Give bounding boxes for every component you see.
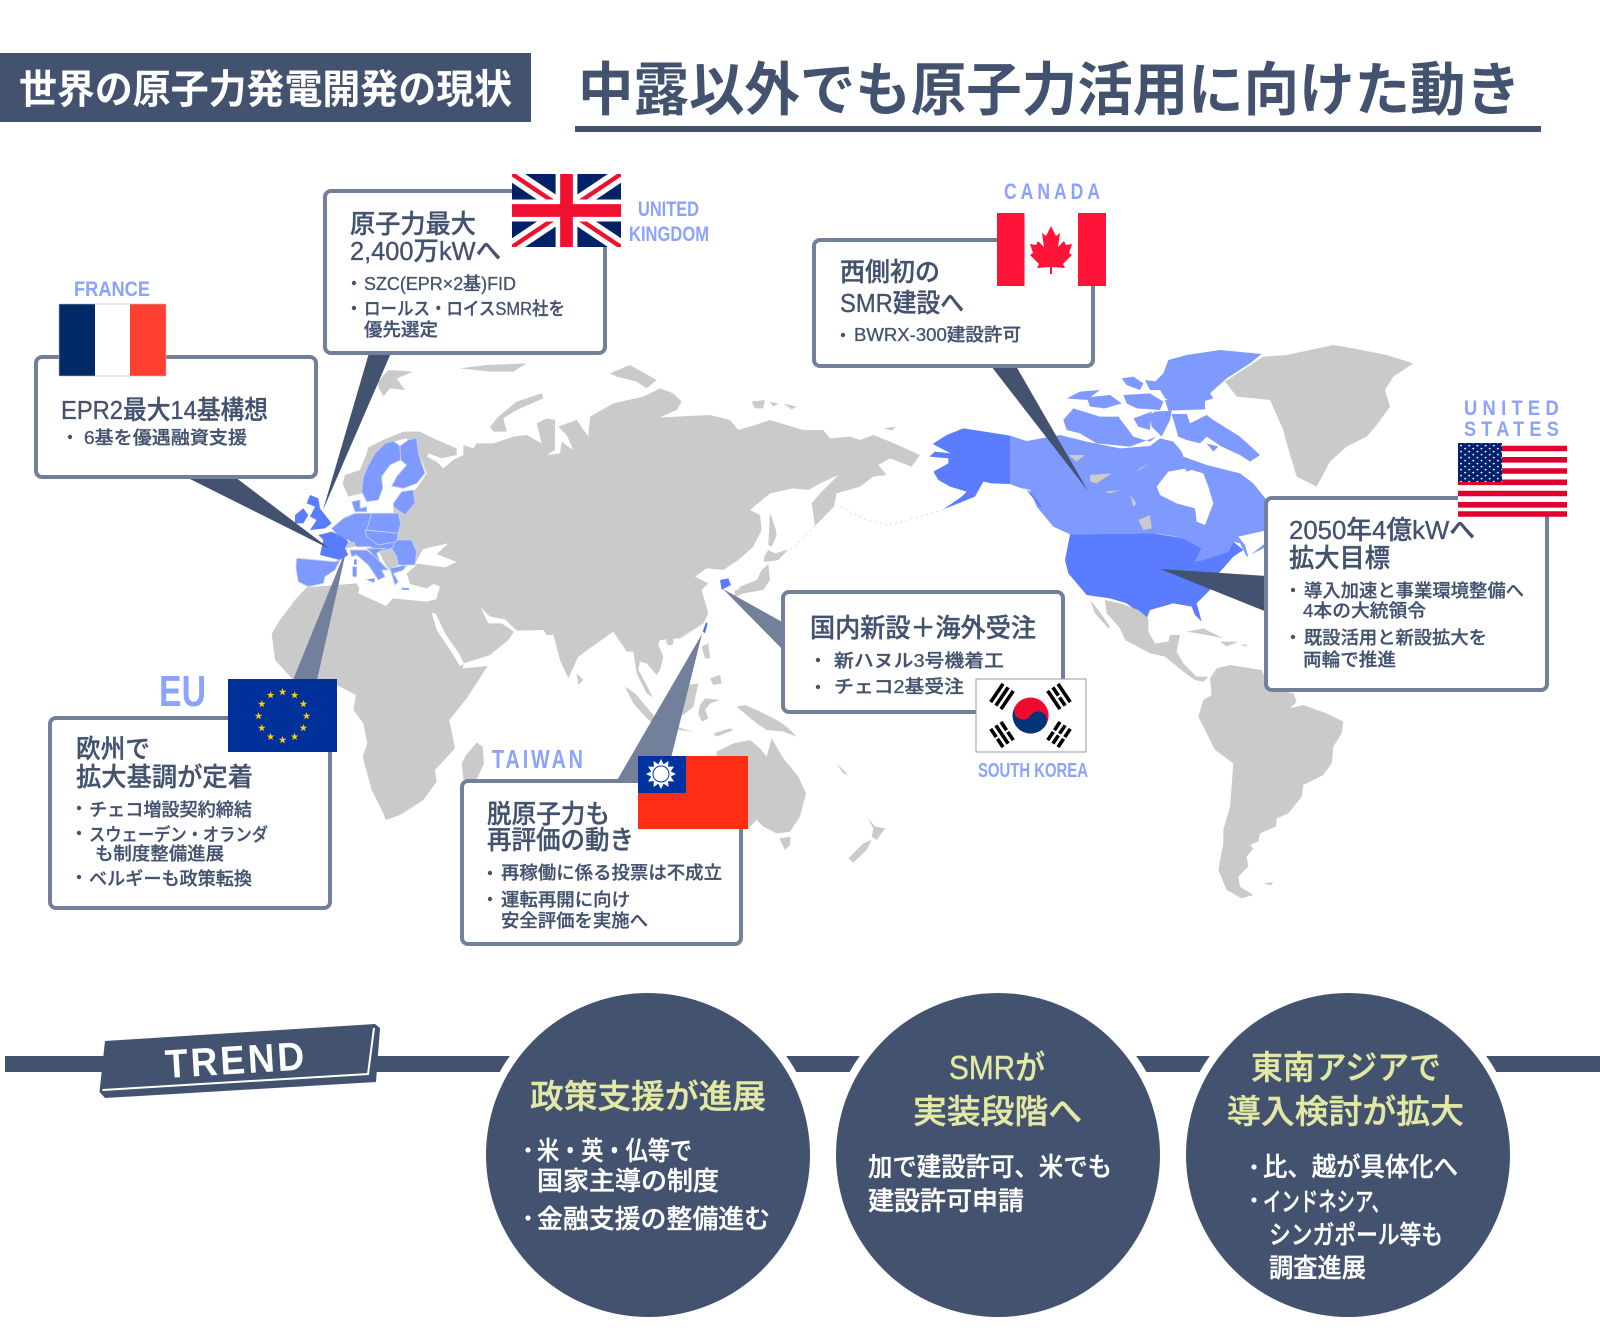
- flag: Taiwan: [638, 756, 748, 829]
- bullets: United States: [1291, 581, 1524, 670]
- bullets: South Korea: 新ハヌル3号機着工: [834, 651, 1004, 671]
- bullets: United Kingdom: SZC(EPR×2基)FID: [364, 274, 516, 294]
- heading: United States: 拡大目標: [1289, 543, 1390, 573]
- circle body: 比、越が具体化へ: [1263, 1152, 1458, 1182]
- panel: United States: [1266, 397, 1567, 690]
- France and United Kingdom highlights: [295, 495, 348, 560]
- Severnaya Zemlya: [610, 365, 657, 388]
- trend circle: Southeast Asia: [1178, 985, 1518, 1325]
- bullets: South Korea: [816, 651, 1004, 697]
- heading: United States: 2050年4億kWへ: [1289, 515, 1475, 545]
- circle body: 調査進展: [1269, 1253, 1366, 1283]
- label: United Kingdom: KINGDOM: [629, 223, 709, 246]
- bullets: United Kingdom: [352, 274, 565, 340]
- bullets: United States: 4本の大統領令: [1303, 601, 1426, 621]
- trend circle: SMR: [828, 985, 1168, 1325]
- Taiwan: [703, 622, 708, 633]
- United States contiguous: [1065, 533, 1243, 622]
- bullets: EU: スウェーデン・オランダ: [89, 824, 268, 845]
- circle body: 米・英・仏等で: [537, 1136, 692, 1166]
- flag: South Korea: [976, 679, 1086, 752]
- bullets: United Kingdom: 優先選定: [364, 320, 438, 340]
- flag: EU: [228, 679, 337, 752]
- Gulf of St Lawrence: [1238, 531, 1265, 557]
- header tag: 世界の原子力発電開発の現状: 世界の原子力発電開発の現状: [19, 68, 512, 112]
- Southeast Asia and Oceania: [625, 638, 885, 863]
- Norway: [343, 432, 457, 497]
- panel: United Kingdom: [325, 174, 709, 353]
- bullets: EU: ベルギーも政策転換: [89, 869, 252, 889]
- label: France: FRANCE: [74, 278, 150, 301]
- Alaska: [929, 428, 1043, 509]
- Red Sea: [432, 613, 464, 666]
- circle body: 加で建設許可、米でも: [868, 1152, 1112, 1182]
- heading: Taiwan: 脱原子力も: [487, 799, 610, 829]
- heading: United States: [1289, 515, 1475, 573]
- panel: South Korea: [783, 592, 1088, 782]
- world map: [272, 345, 1413, 898]
- heading: EU: [76, 734, 253, 792]
- Eurasia and Africa landmass: [272, 388, 920, 820]
- bullets: EU: チェコ増設契約締結: [89, 800, 252, 820]
- Sri Lanka: [577, 673, 583, 685]
- bullets: Taiwan: 再稼働に係る投票は不成立: [501, 863, 722, 883]
- callout pointer: United Kingdom: [323, 353, 391, 510]
- label: Canada: CANADA: [1004, 179, 1104, 204]
- South Korea: [720, 578, 731, 590]
- heading: EU: 拡大基調が定着: [76, 762, 253, 792]
- label: United Kingdom: [629, 198, 709, 246]
- Franz Josef Land: [460, 363, 527, 372]
- label: Taiwan: TAIWAN: [492, 744, 586, 774]
- panel: Taiwan: [462, 744, 748, 944]
- bullet: Canada: BWRX-300建設許可: [854, 325, 1021, 345]
- heading: Canada: 西側初の: [840, 257, 940, 287]
- callout pointer: Canada: [991, 366, 1088, 491]
- Greenland: [1225, 345, 1413, 487]
- label: United States: STATES: [1464, 418, 1564, 441]
- label: EU: EU: [159, 667, 206, 716]
- flag: United States: [1458, 443, 1567, 516]
- circle body: [868, 1152, 1112, 1216]
- Canada mainland: [1010, 435, 1267, 562]
- Hudson Bay: [1157, 468, 1213, 525]
- Madagascar: [462, 743, 484, 779]
- Svalbard: [377, 370, 413, 397]
- circle body: [1251, 1152, 1458, 1283]
- label: South Korea: SOUTH KOREA: [978, 760, 1088, 782]
- Caribbean islands: [1187, 628, 1247, 647]
- flag: United Kingdom: [512, 174, 621, 247]
- bullets: United Kingdom: ロールス・ロイスSMR社を: [364, 299, 565, 319]
- label: United States: [1464, 397, 1564, 441]
- Canadian Arctic archipelago: [1063, 350, 1262, 472]
- New Siberian and Wrangel islands: [752, 400, 896, 431]
- circle body: 金融支援の整備進む: [537, 1204, 770, 1234]
- circle body: 国家主導の制度: [537, 1166, 719, 1196]
- bullets: EU: も制度整備進展: [95, 844, 224, 864]
- TREND sign: [100, 1024, 380, 1098]
- main title with underline: 中露以外でも原子力活用に向けた動き: [578, 58, 1521, 123]
- circle heading: 東南アジアで: [1251, 1049, 1441, 1086]
- heading: United Kingdom: 原子力最大: [350, 209, 476, 239]
- heading: Canada: [840, 257, 964, 318]
- Aleutian and Kuril islands: [840, 507, 943, 525]
- circle heading: 導入検討が拡大: [1227, 1093, 1464, 1130]
- bullets: South Korea: チェコ2基受注: [834, 677, 964, 697]
- Black Sea: [415, 543, 457, 567]
- Canadian lakes: [1068, 455, 1200, 562]
- heading: United Kingdom: 2,400万kWへ: [350, 236, 501, 266]
- Japan: [733, 513, 788, 597]
- heading: Canada: SMR建設へ: [840, 288, 964, 318]
- Falkland Islands: [1264, 882, 1273, 885]
- circle body: インドネシア、: [1263, 1187, 1390, 1217]
- heading: Taiwan: [487, 799, 634, 855]
- callout pointer: United States: [1160, 569, 1267, 612]
- label: United States: UNITED: [1464, 397, 1564, 420]
- Baja California: [1090, 600, 1110, 628]
- Balkans: [378, 547, 398, 571]
- flag: France: [59, 304, 166, 376]
- bullets: United States: 既設活用と新設拡大を: [1304, 628, 1487, 648]
- circle heading: SMRが: [949, 1049, 1045, 1086]
- panel: France: [36, 278, 316, 477]
- heading: South Korea: 国内新設＋海外受注: [810, 613, 1036, 643]
- heading: EU: 欧州で: [76, 734, 150, 764]
- Novaya Zemlya: [490, 393, 543, 432]
- circle body: [525, 1136, 770, 1234]
- bullets: United States: 両輪で推進: [1303, 650, 1396, 670]
- circle heading: 実装段階へ: [913, 1093, 1082, 1130]
- callout pointer: South Korea: [723, 589, 784, 651]
- flag: Canada: [997, 213, 1106, 286]
- South America: [1198, 665, 1343, 898]
- TREND sign: TREND: [164, 1034, 308, 1087]
- panel: EU: [50, 667, 337, 908]
- circle heading: [913, 1049, 1082, 1130]
- bullets: Taiwan: 安全評価を実施へ: [501, 911, 648, 931]
- circle heading: [1227, 1049, 1464, 1130]
- bullets: Taiwan: [488, 863, 722, 931]
- heading: France: EPR2最大14基構想: [61, 395, 268, 425]
- Mexico and Central America: [1105, 600, 1208, 682]
- panel: Canada: [814, 179, 1106, 366]
- bullet: France: 6基を優遇融資支援: [84, 428, 247, 448]
- callout pointer: EU: [293, 547, 347, 680]
- bullets: Taiwan: 運転再開に向け: [501, 890, 630, 910]
- heading: Taiwan: 再評価の動き: [487, 825, 634, 855]
- heading: United Kingdom: [350, 209, 501, 266]
- callout pointer: Taiwan: [616, 634, 702, 782]
- trend band: [5, 1056, 1600, 1072]
- bullets: United States: 導入加速と事業環境整備へ: [1304, 581, 1524, 601]
- label: United Kingdom: UNITED: [638, 198, 699, 221]
- header tag: 世界の原子力発電開発の現状: [0, 53, 531, 122]
- circle body: 建設許可申請: [868, 1186, 1024, 1216]
- trend circle: policy support: [478, 985, 818, 1325]
- bullets: EU: [77, 800, 268, 889]
- circle heading: 政策支援が進展: [530, 1078, 766, 1115]
- European Union members: [296, 438, 425, 590]
- circle body: シンガポール等も: [1269, 1220, 1443, 1250]
- callout pointer: France: [186, 477, 330, 549]
- Switzerland: [345, 542, 355, 548]
